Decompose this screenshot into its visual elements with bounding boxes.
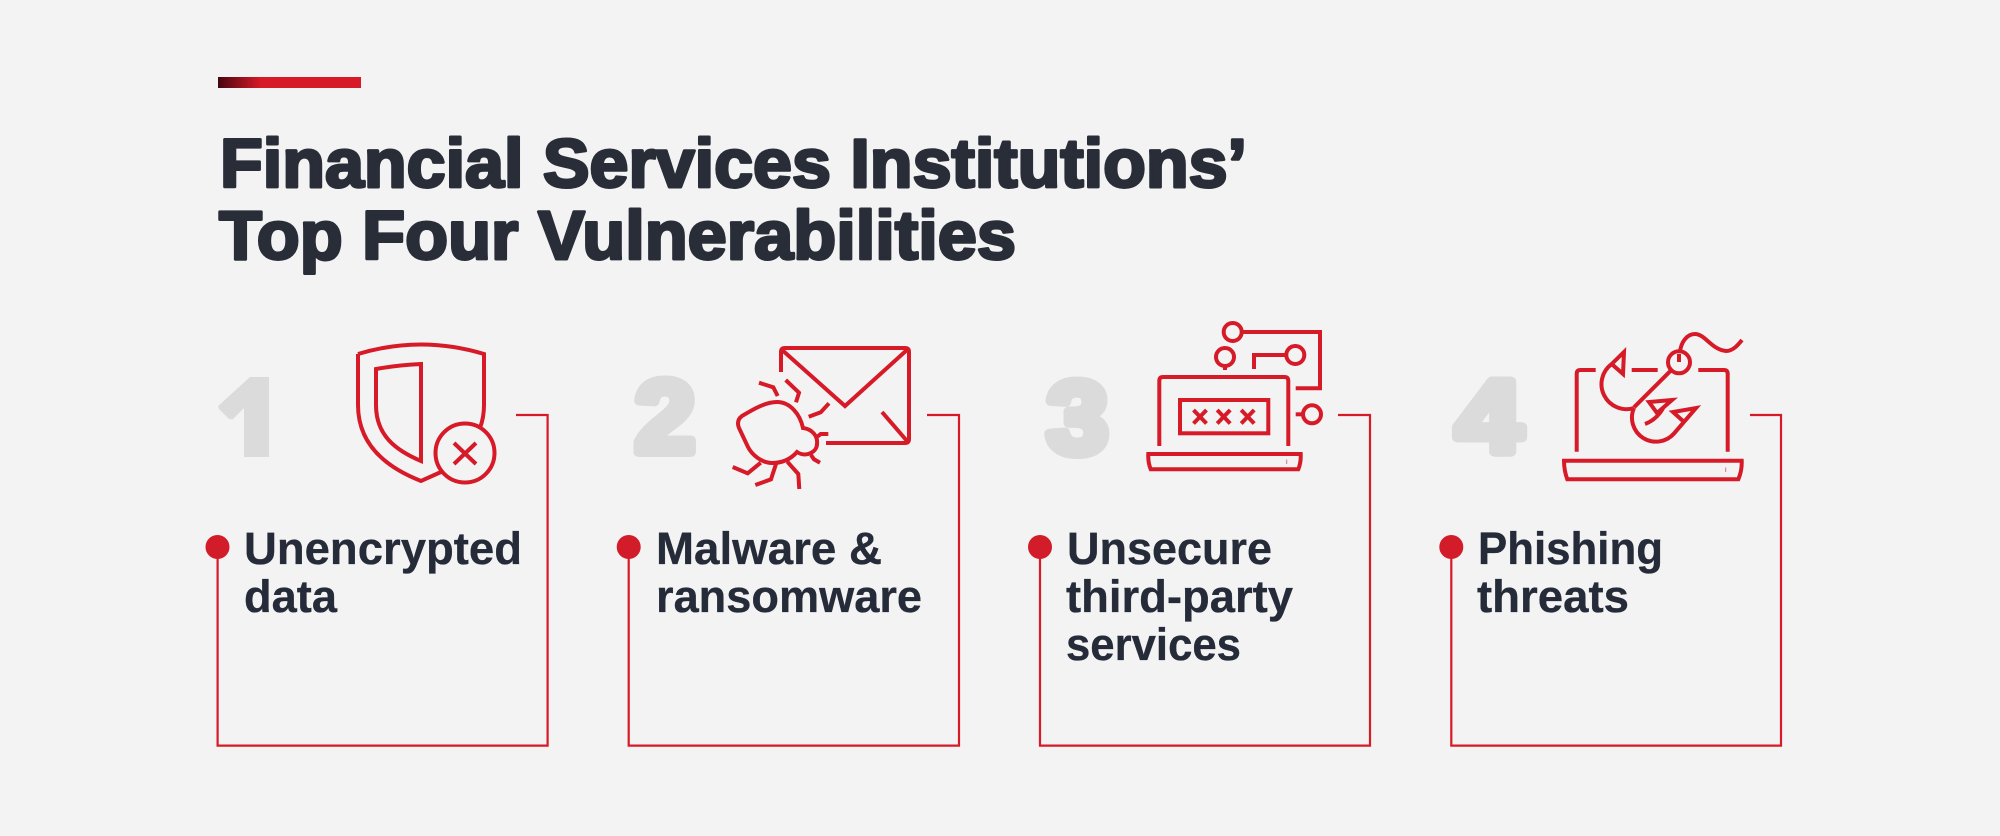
label bbox=[1066, 523, 1293, 670]
label: ransomware bbox=[656, 571, 922, 622]
icon: laptop with password and circuit bbox=[1148, 323, 1321, 469]
frame line bbox=[1451, 415, 1781, 746]
title: Financial Services Institutions’ bbox=[220, 125, 1247, 202]
label: Phishing bbox=[1478, 523, 1663, 574]
label: data bbox=[244, 571, 338, 622]
panel: malware and ransomware bbox=[617, 348, 959, 746]
label: third-party bbox=[1066, 571, 1293, 622]
title bbox=[219, 125, 1247, 274]
accent bar bbox=[218, 77, 361, 88]
frame line bbox=[218, 415, 548, 746]
label: Unsecure bbox=[1067, 523, 1272, 574]
label: services bbox=[1066, 619, 1241, 670]
marker dot bbox=[617, 535, 641, 559]
marker dot bbox=[1439, 535, 1463, 559]
marker dot bbox=[1028, 535, 1052, 559]
frame line bbox=[629, 415, 959, 746]
number 2: 2 bbox=[635, 360, 695, 474]
panel: phishing threats bbox=[1439, 334, 1781, 746]
panel: unencrypted data bbox=[206, 344, 548, 746]
label: threats bbox=[1477, 571, 1629, 622]
number 1: 1 bbox=[226, 360, 284, 476]
label: Unencrypted bbox=[244, 523, 522, 574]
icon: laptop with fish hook bbox=[1564, 334, 1742, 479]
icon: shield with x bbox=[358, 344, 494, 482]
title: Top Four Vulnerabilities bbox=[219, 197, 1016, 274]
icon: bug and envelope bbox=[733, 348, 909, 489]
label: Malware & bbox=[656, 523, 882, 574]
label bbox=[244, 523, 522, 622]
marker dot bbox=[206, 535, 230, 559]
panel: unsecure third-party services bbox=[1028, 323, 1370, 746]
number 4: 4 bbox=[1456, 360, 1522, 474]
label bbox=[1477, 523, 1663, 622]
label bbox=[656, 523, 922, 622]
number 3: 3 bbox=[1047, 361, 1108, 475]
frame line bbox=[1040, 415, 1370, 746]
